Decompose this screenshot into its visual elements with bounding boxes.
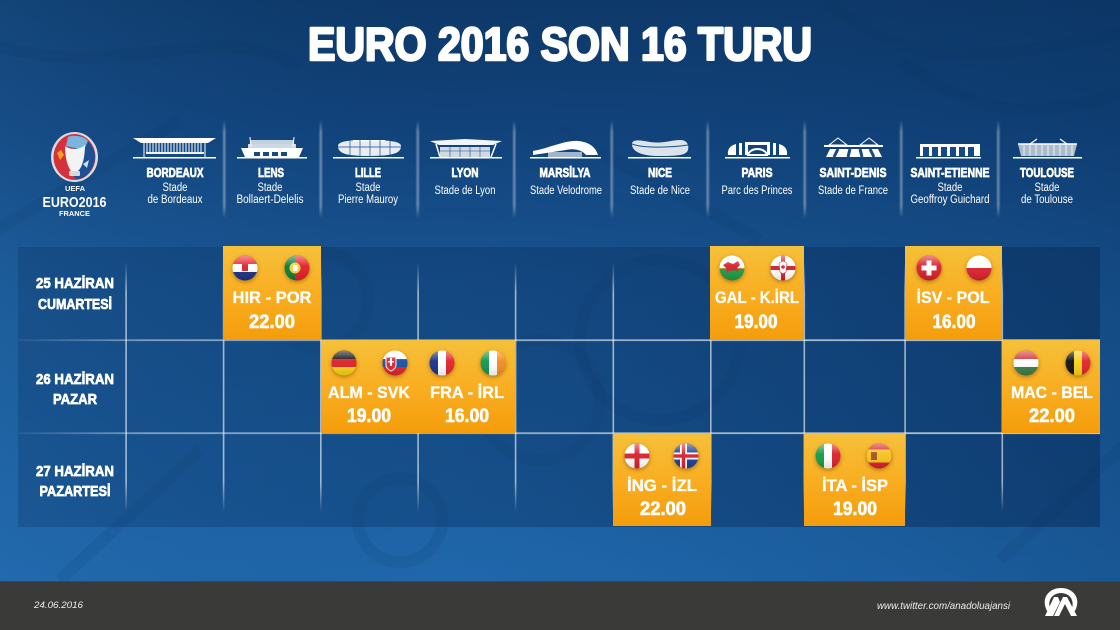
venue: Saint-Denis (818, 138, 888, 197)
venue: Lille: LILLE (355, 165, 381, 180)
date stamp: 24.06.2016 (33, 600, 84, 611)
venue: Bordeaux: BORDEAUX (146, 165, 204, 180)
venue: Toulouse: TOULOUSE (1020, 165, 1074, 180)
panel: match schedule grid (18, 246, 1100, 527)
date label: 26 Haziran Pazar (36, 371, 114, 408)
logo: UEFA Euro 2016 France (42, 132, 106, 218)
match: Germany - Slovakia (321, 340, 418, 433)
match: Italy - Spain (804, 433, 905, 526)
icon: Anadolu Agency logo (1045, 588, 1077, 616)
date label: 26 Haziran Pazar: PAZAR (53, 391, 97, 408)
title: EURO 2016 SON 16 TURU (308, 18, 812, 70)
date label: 25 Haziran Cumartesi (36, 275, 114, 313)
match: Switzerland - Poland (905, 246, 1002, 340)
date label: 27 Haziran Pazartesi: 27 HAZİRAN (36, 463, 114, 480)
logo: UEFA Euro 2016 France: EURO2016 (42, 195, 106, 211)
match: Hungary - Belgium (1002, 340, 1100, 433)
header column separators (223, 120, 1000, 218)
venue: Lille: Stade (356, 182, 380, 194)
twitter address: www.twitter.com/anadoluajansi (877, 601, 1011, 612)
venue: Lens: Stade (258, 182, 282, 194)
match: Croatia - Portugal: HIR - POR (232, 288, 312, 307)
venue: Lens: LENS (258, 165, 284, 180)
venue: Nice (628, 140, 691, 197)
venue: Marsilya: Stade Velodrome (530, 185, 602, 197)
venue: Paris: PARIS (742, 165, 773, 180)
venue: Lens: Bollaert-Delelis (236, 194, 304, 206)
venue: Saint-Denis: Stade de France (818, 185, 888, 197)
venue: Lyon: Stade de Lyon (434, 185, 496, 197)
venue: Saint-Etienne: Geoffroy Guichard (910, 194, 990, 206)
match: Wales - Northern Ireland: GAL - K.İRL (715, 288, 799, 307)
venue: Nice: Stade de Nice (630, 185, 690, 197)
date label: 26 Haziran Pazar: 26 HAZİRAN (36, 371, 114, 388)
match: France - Ireland: FRA - İRL (430, 383, 504, 402)
match: Italy - Spain: 19.00 (833, 499, 877, 520)
venue: Paris: Parc des Princes (722, 185, 793, 197)
venue: Toulouse: Stade (1034, 182, 1060, 194)
venue: Lyon: LYON (452, 165, 478, 180)
venue: Saint-Etienne: SAINT-ETIENNE (910, 165, 990, 180)
venue: Nice: NICE (648, 165, 672, 180)
venue: Lyon (430, 139, 502, 197)
match: England - Iceland: 22.00 (640, 499, 686, 520)
match: Switzerland - Poland: İSV - POL (916, 288, 990, 307)
venue: Lille (333, 140, 404, 206)
venue: Lille: Pierre Mauroy (338, 194, 398, 206)
logo: UEFA Euro 2016 France: FRANCE (59, 211, 90, 218)
date label: 25 Haziran Cumartesi: CUMARTESİ (38, 296, 112, 313)
date label: 27 Haziran Pazartesi: PAZARTESİ (40, 483, 110, 500)
venue: Marsilya: MARSİLYA (540, 165, 591, 180)
match: Germany - Slovakia: ALM - SVK (328, 383, 411, 402)
venue: Bordeaux (133, 138, 216, 206)
match: Italy - Spain: İTA - İSP (822, 476, 888, 495)
venue: Saint-Etienne: Stade (938, 182, 962, 194)
venue: Toulouse (1013, 139, 1082, 206)
venue: Saint-Etienne (910, 144, 990, 206)
match: England - Iceland (613, 433, 711, 526)
venue: Saint-Denis: SAINT-DENIS (820, 165, 887, 180)
venue: Bordeaux: de Bordeaux (148, 194, 203, 206)
match: Croatia - Portugal: 22.00 (249, 312, 295, 333)
match: Switzerland - Poland: 16.00 (932, 312, 976, 333)
venue: Paris (722, 142, 793, 197)
venue: Marsilya (530, 141, 602, 197)
match: England - Iceland: İNG - İZL (627, 476, 697, 495)
match: France - Ireland (418, 340, 515, 433)
match: Hungary - Belgium: MAC - BEL (1011, 383, 1093, 402)
match: France - Ireland: 16.00 (445, 406, 489, 427)
match: Wales - Northern Ireland (710, 246, 804, 340)
match: Hungary - Belgium: 22.00 (1029, 406, 1075, 427)
footer bar (0, 581, 1120, 630)
date label: 27 Haziran Pazartesi (36, 463, 114, 500)
venue: Toulouse: de Toulouse (1021, 194, 1073, 206)
logo: UEFA Euro 2016 France: UEFA (65, 186, 85, 193)
match: Croatia - Portugal (223, 246, 321, 340)
match: Wales - Northern Ireland: 19.00 (734, 312, 778, 333)
date label: 25 Haziran Cumartesi: 25 HAZİRAN (36, 275, 114, 292)
venue: Lens (236, 137, 307, 206)
match: Germany - Slovakia: 19.00 (347, 406, 391, 427)
venue: Bordeaux: Stade (162, 182, 188, 194)
